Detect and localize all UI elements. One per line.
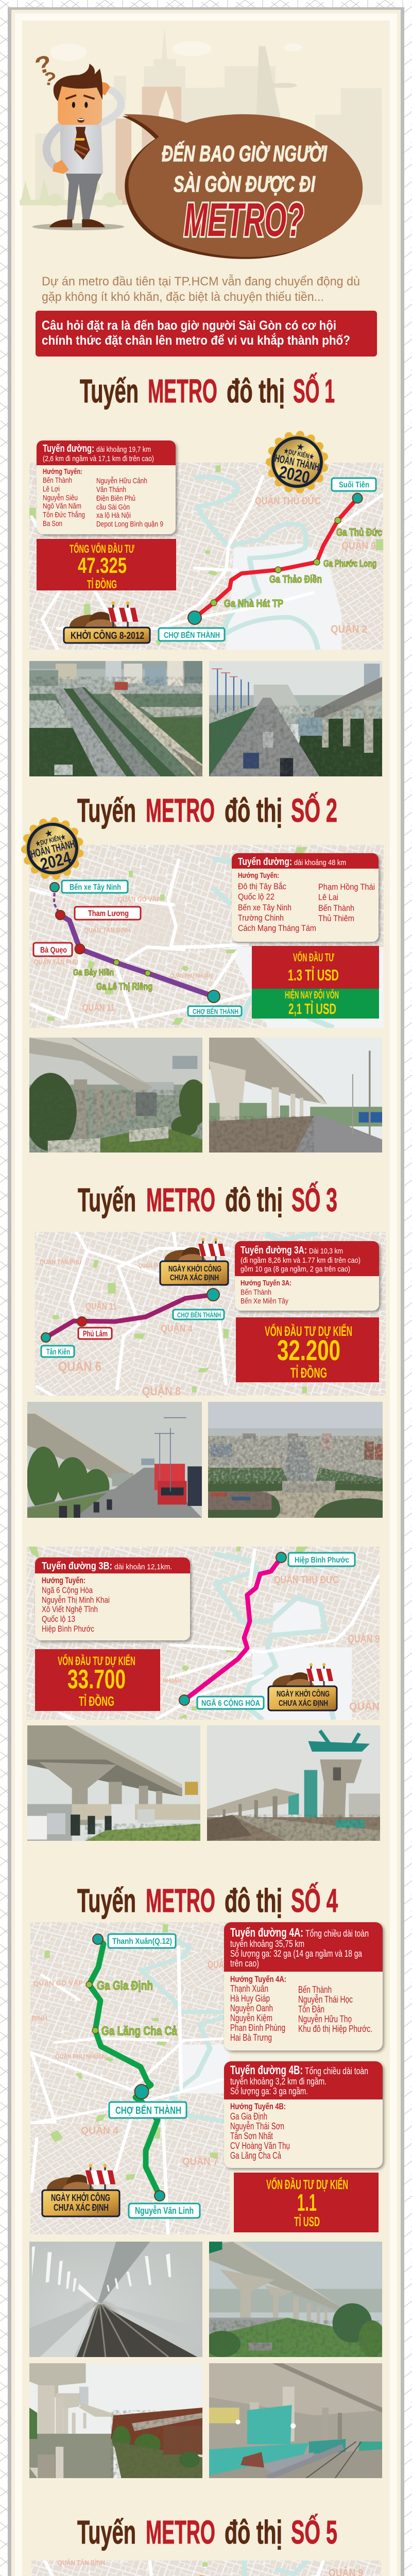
speech bubble (123, 114, 363, 259)
district labels: QUẬN TÂN PHÚ (34, 957, 78, 966)
station names: CHỢ BẾN THÀNH (164, 630, 220, 640)
info card 4A: Hai Bà Trưng (230, 2032, 272, 2043)
info card line 3B: Hiệp Bình Phước (42, 1624, 94, 1634)
station names (33, 880, 242, 1016)
district labels: QUẬN 2 (331, 623, 367, 635)
info card line 3A: Dài 10,3 km (309, 1247, 343, 1256)
district labels (40, 1257, 193, 1398)
investment box line 3B: 33.700 (67, 1665, 126, 1694)
district labels (34, 894, 212, 1013)
heading line 1: Tuyến (80, 372, 139, 410)
bubble title: METRO? (184, 194, 304, 246)
info card line 2: Bến Thành (318, 903, 354, 913)
photo: viaduct with traffic (27, 1725, 200, 1841)
info card line 2 (232, 853, 379, 942)
heading line 2: SỐ 2 (291, 792, 337, 829)
heading line 2: đô thị (225, 792, 282, 829)
investment box line 3B: VỐN ĐẦU TƯ DỰ KIẾN (58, 1654, 135, 1668)
district labels: QUẬN PH (139, 1262, 160, 1269)
info card line 3A: Tuyến đường 3A: (241, 1245, 307, 1256)
photo: viaduct over road (209, 1038, 382, 1153)
heading line 1: đô thị (227, 372, 285, 410)
question marks: ? (32, 49, 55, 79)
heading line 4: đô thị (225, 1882, 282, 1919)
badge: completion 2020: ★ (296, 442, 305, 452)
district labels: QUẬN 9 (348, 1633, 380, 1645)
map line 2 (29, 845, 384, 1028)
info card line 3B: Hướng Tuyến: (42, 1575, 85, 1585)
district labels (31, 1959, 224, 2167)
heading line 5 (77, 2514, 337, 2551)
question marks: ? (42, 67, 57, 90)
investment box line 3A: TỈ ĐỒNG (290, 1364, 327, 1381)
heading line 1: SỐ 1 (293, 372, 335, 410)
district labels: QUẬN 4 (81, 2124, 119, 2137)
district labels: QUẬN 11 (82, 1002, 115, 1013)
station names: Ga Nhà Hát TP (224, 598, 283, 609)
station names: CHỢ BẾN THÀNH (193, 1007, 238, 1015)
section: metro line 3B (27, 1547, 381, 1841)
info card line 3B: Tuyến đường 3B: (42, 1561, 112, 1572)
info card 4A: Hướng Tuyến 4A: (230, 1974, 286, 1984)
heading line 4 (77, 1882, 338, 1919)
badge: completion 2024: 2024 (38, 848, 73, 874)
info card line 1: xa lộ Hà Nội (96, 511, 131, 520)
photo: road with viaduct (209, 661, 382, 776)
bubble title: SÀI GÒN ĐƯỢC ĐI (174, 171, 316, 197)
district labels (163, 1573, 380, 1713)
investment box line 3A: 32.200 (277, 1334, 340, 1366)
info card 4A: Tôn Đản (298, 2004, 324, 2014)
heading line 1: METRO (148, 372, 217, 410)
info card line 3A: Bến Xe Miền Tây (241, 1297, 288, 1306)
intro text: Dự án metro đầu tiên tại TP.HCM vẫn đang chuyển động dù (42, 275, 360, 289)
photo: road and red truck (27, 1402, 202, 1518)
info card 4A: Nguyễn Oanh (230, 2003, 273, 2013)
station names: Thanh Xuân(Q.12) (112, 1937, 172, 1946)
heading line 3: Tuyến (78, 1181, 136, 1218)
icon: construction date unknown: CHƯA XÁC ĐỊNH (170, 1273, 219, 1282)
info card 4B (224, 2061, 383, 2168)
photo: city and river aerial (208, 1402, 383, 1518)
info card line 1: dài khoảng 19,7 km (96, 445, 151, 454)
info card 4B: Hướng Tuyến 4B: (230, 2102, 286, 2111)
info card line 2: dài khoảng 48 km (294, 858, 346, 867)
bubble title: ĐẾN BAO GIỜ NGƯỜI (162, 141, 328, 166)
icon: construction date unknown: NGÀY KHỞI CÔNG (51, 2192, 110, 2203)
photo: viaduct over canal (29, 2363, 202, 2478)
heading line 3: SỐ 3 (291, 1181, 337, 1218)
station names: Tham Lương (88, 909, 129, 918)
station names: Bà Quẹo (40, 946, 67, 955)
badge: completion 2020: 2020 (278, 462, 312, 487)
station names: Ga Lê Thị Riêng (96, 981, 152, 992)
district labels: QUẬN 6 (58, 1359, 101, 1374)
map line 3A (35, 1232, 386, 1398)
route line 1 (195, 498, 357, 618)
info card 4A: tuyến khoảng 35,75 km (230, 1939, 304, 1949)
info card line 3B: dài khoản 12,1km. (114, 1563, 172, 1571)
info card line 1: Văn Thánh (96, 485, 126, 494)
icon: construction date unknown: CHƯA XÁC ĐỊNH (54, 2202, 109, 2213)
info card 4A: Phan Đình Phùng (230, 2023, 285, 2033)
badge: completion 2020 (265, 430, 330, 495)
station names (41, 1310, 224, 1357)
heading line 3 (78, 1181, 337, 1218)
station names: Ga Phước Long (323, 558, 376, 569)
info card line 1 (37, 440, 176, 534)
info card line 2: Phạm Hồng Thái (318, 882, 375, 892)
investment box line 4 (234, 2173, 379, 2232)
investment box line 1: 47.325 (78, 553, 127, 578)
badge: completion 2020: ★DỰ KIẾN★ (283, 447, 315, 461)
heading line 2: Tuyến (77, 792, 136, 829)
icon: construction date unknown: CHƯA XÁC ĐỊNH (279, 1698, 328, 1708)
district labels: BÌNH (31, 2014, 47, 2022)
section: metro line 3A (27, 1181, 386, 1518)
photo: construction pier (207, 1725, 380, 1841)
badge: completion 2024: ★ (44, 828, 54, 839)
station names: Suối Tiên (339, 481, 369, 489)
icon: construction date unknown (160, 1238, 228, 1285)
info card 4B: Tổng chiều dài toàn (305, 2066, 368, 2076)
info card 4A: Khu đô thị Hiệp Phước. (298, 2024, 372, 2034)
info card 4B: Nguyễn Thái Sơn (230, 2121, 284, 2131)
info card 4B: CV Hoàng Văn Thụ (230, 2141, 290, 2151)
info card line 1: Điện Biên Phủ (96, 494, 135, 503)
section: metro line 5 (29, 2514, 385, 2576)
info card line 2: Cách Mạng Tháng Tám (238, 923, 316, 933)
info card 4A: Nguyễn Hữu Thọ (298, 2013, 352, 2024)
badge: completion 2024: HOÀN THÀNH (29, 838, 76, 860)
info card line 1: Ba Son (43, 519, 62, 528)
question callout (36, 311, 377, 357)
info card line 3B: Ngã 6 Cộng Hòa (42, 1585, 93, 1595)
icon: construction date unknown: NGÀY KHỞI CÔNG (168, 1264, 221, 1274)
heading line 3: METRO (146, 1181, 215, 1218)
station names: NGÃ 6 CỘNG HÒA (201, 1698, 260, 1708)
route line 4 (89, 1939, 160, 2196)
info card line 2: Trường Chinh (238, 913, 284, 923)
investment box line 3A (236, 1317, 379, 1382)
station names: Hiệp Bình Phước (295, 1556, 349, 1565)
station names: Bến xe Tây Ninh (70, 883, 121, 892)
district labels: QUẬN TÂN BÌNH (84, 925, 130, 934)
question callout: Câu hỏi đặt ra là đến bao giờ người Sài Gòn có cơ hội (42, 318, 336, 333)
info card 4B: Tân Sơn Nhất (230, 2131, 273, 2141)
stations line 3B (179, 1552, 286, 1705)
info card 4A: Nguyễn Kiệm (230, 2012, 272, 2023)
map line 5 (31, 2558, 381, 2576)
info card line 1: Depot Long Bình quận 9 (96, 520, 163, 529)
stations line 3A (41, 1289, 219, 1342)
map line 1 (29, 463, 383, 650)
info card 4A: Bến Thành (298, 1985, 332, 1995)
investment box line 1: TỔNG VỐN ĐẦU TƯ (70, 542, 134, 555)
heading line 5: METRO (146, 2514, 215, 2551)
investment box line 1 (37, 539, 176, 591)
district labels: QUẬN THỦ ĐỨC (255, 495, 321, 507)
section: metro line 1 (29, 372, 383, 776)
intro text: gặp không ít khó khăn, đặc biệt là chuyện thiếu tiền... (42, 290, 324, 304)
photo: viaduct and greenery (209, 2242, 382, 2357)
info card 4B: Tuyến đường 4B: (230, 2063, 303, 2077)
info card line 1: Lê Lợi (43, 485, 60, 494)
heading line 5: Tuyến (77, 2514, 136, 2551)
district labels: QUẬN TÂN PHÚ (40, 1257, 81, 1266)
skyline (20, 26, 382, 207)
investment box line 2 (252, 946, 379, 1019)
station names: Phú Lâm (83, 1330, 108, 1338)
info card line 2: Quốc lộ 22 (238, 892, 274, 902)
info card line 3A: (đi ngầm 8,26 km và 1.77 km đi trên cao) (241, 1256, 360, 1265)
info card 4A: Nguyễn Thái Học (298, 1994, 353, 2005)
question callout: chính thức đặt chân lên metro để vi vu khắp thành phố? (42, 332, 350, 348)
district labels: QUẬN 9 (341, 539, 376, 552)
district labels: QUẬN 7 (182, 2155, 218, 2167)
info card line 1: Ngô Văn Năm (43, 502, 81, 511)
info card line 3A (235, 1241, 379, 1311)
info card 4B: Ga Gia Định (230, 2111, 267, 2122)
investment box line 2: 2,1 TỈ USD (288, 1000, 336, 1018)
info card line 2: Đô thị Tây Bắc (238, 882, 286, 891)
photo: bridge aerial (29, 661, 202, 776)
heading line 1 (80, 372, 335, 410)
info card line 3A: Hướng Tuyến 3A: (241, 1279, 291, 1287)
station names: Ga Thủ Đức (336, 527, 382, 538)
info card line 1: Nguyễn Siêu (43, 494, 78, 502)
map line 3B (27, 1547, 380, 1720)
info card 4A: Tuyến đường 4A: (230, 1926, 303, 1940)
info card 4A: Thạnh Xuân (230, 1984, 268, 1994)
district labels (31, 2558, 366, 2576)
investment box line 4: TỈ USD (294, 2214, 320, 2229)
icon: construction date unknown: NGÀY KHỞI CÔNG (277, 1689, 330, 1699)
info card 4A: Số lượng ga: 32 ga (14 ga ngầm và 18 ga (230, 1948, 363, 1959)
info card line 1: Hướng Tuyến: (43, 467, 82, 476)
info card 4A: trên cao) (230, 1958, 259, 1969)
info card line 1: Tôn Đức Thắng (43, 511, 85, 519)
investment box line 3A: VỐN ĐẦU TƯ DỰ KIẾN (265, 1323, 352, 1339)
heading line 4: SỐ 4 (291, 1882, 338, 1919)
photo: tunnel with tracks (29, 2242, 202, 2357)
station names: Tân Kiên (46, 1348, 70, 1357)
route line 3A (46, 1295, 213, 1337)
info card line 1: (2,6 km đi ngầm và 17,1 km đi trên cao) (43, 454, 154, 463)
district labels (255, 495, 376, 635)
district labels: QUẬN PHÚ NHUẬN (170, 972, 212, 979)
route line 2 (54, 887, 214, 996)
district labels: QUẬN 11 (85, 1301, 117, 1312)
icon: construction date unknown (42, 2164, 119, 2216)
station names (159, 478, 382, 641)
photo: underground station (209, 2363, 382, 2478)
district labels: QUẬN TÂN BÌNH (58, 2558, 105, 2567)
info card line 2: Tuyến đường: (238, 856, 292, 868)
info card line 1: Bến Thành (43, 476, 72, 485)
info card line 3B: Xô Viết Nghệ Tĩnh (42, 1604, 98, 1614)
investment box line 2: 1.3 TỈ USD (288, 966, 339, 984)
heading line 2 (77, 792, 337, 829)
section: metro line 4 (29, 1882, 385, 2478)
icon: construction date unknown (268, 1663, 337, 1710)
station names: Ga Thảo Điền (269, 574, 322, 585)
district labels: QUẬN 4 (161, 1323, 193, 1334)
info card line 2: Lê Lai (318, 892, 338, 902)
station names: Ga Gia Định (97, 1979, 153, 1993)
investment box line 3B (35, 1649, 160, 1711)
info card line 1: cầu Sài Gòn (96, 503, 130, 512)
info card line 2: Hướng Tuyến: (238, 871, 279, 880)
info card 4B: Số lượng ga: 3 ga ngầm. (230, 2086, 308, 2096)
station names: Ga Bảy Hiền (73, 968, 114, 977)
stations line 1 (188, 494, 363, 624)
investment box line 4: VỐN ĐẦU TƯ DỰ KIẾN (266, 2177, 348, 2192)
info card line 3A: gồm 10 ga (8 ga ngầm, 2 ga trên cao) (241, 1265, 350, 1274)
heading line 2: METRO (146, 792, 215, 829)
bubble title (162, 141, 328, 246)
info card 4A: Hà Huy Giáp (230, 1993, 270, 2004)
district labels: QUẬN PHÚ NHUẬN (55, 2053, 106, 2060)
investment box line 4: 1.1 (297, 2189, 317, 2216)
badge: completion 2024 (20, 816, 85, 882)
district labels: QUẬN 8 (142, 1384, 181, 1398)
man character (32, 64, 124, 230)
station names: Nguyễn Văn Linh (135, 2205, 194, 2216)
badge: completion 2020: HOÀN THÀNH (273, 452, 320, 473)
district labels: NHUẬN (163, 1676, 181, 1684)
info card line 3B: Nguyễn Thị Minh Khai (42, 1595, 110, 1605)
info card line 2: Bến xe Tây Ninh (238, 903, 291, 912)
station names: CHỢ BẾN THÀNH (177, 1311, 221, 1319)
heading line 4: Tuyến (77, 1882, 136, 1919)
info card line 1: Tuyến đường: (43, 443, 94, 454)
icon: construction start (64, 601, 150, 643)
investment box line 3B: TỈ ĐỒNG (79, 1693, 114, 1709)
hero illustration (20, 26, 382, 259)
info card line 3B: Quốc lộ 13 (42, 1614, 75, 1624)
intro text (42, 275, 360, 304)
station names: CHỢ BẾN THÀNH (115, 2105, 181, 2116)
info card 4B: tuyến khoảng 3,2 km đi ngầm. (230, 2076, 327, 2087)
district labels: QUẬN THỦ ĐỨC (274, 1573, 339, 1586)
map line 4 (30, 1922, 230, 2234)
district labels: QUẬN (349, 1700, 380, 1713)
stations line 2 (50, 883, 220, 1003)
stations line 4 (86, 1934, 165, 2201)
info card line 2: Thủ Thiêm (318, 913, 354, 923)
info card line 3B (35, 1557, 190, 1640)
photo: viaduct and tree (29, 1038, 202, 1153)
info card 4A (224, 1922, 383, 2050)
badge: completion 2024: ★DỰ KIẾN★ (35, 833, 66, 848)
question marks (32, 49, 57, 90)
section: metro line 2 (20, 792, 384, 1153)
info card line 3A: Bến Thành (241, 1288, 271, 1297)
info card 4A: Tổng chiều dài toàn (305, 1928, 369, 1939)
icon: construction start: KHỞI CÔNG 8-2012 (71, 630, 144, 641)
heading line 4: METRO (146, 1882, 215, 1919)
route line 3B (184, 1557, 281, 1700)
investment box line 2: HIỆN NAY ĐỘI VỐN (285, 989, 339, 1001)
station names (97, 1934, 200, 2218)
station names: Ga Lăng Cha Cả (101, 2024, 178, 2038)
station names (197, 1553, 355, 1709)
heading line 5: đô thị (225, 2514, 282, 2551)
district labels: QUẢ (208, 1959, 224, 1971)
heading line 3: đô thị (225, 1181, 283, 1218)
investment box line 1: TỈ ĐỒNG (87, 577, 117, 591)
district labels: QUẬN GÒ VẤP (118, 894, 161, 903)
info card 4B: Ga Lăng Cha Cả (230, 2150, 282, 2161)
district labels: QUẬN GÒ VẤP (33, 1978, 83, 1987)
investment box line 2: VỐN ĐẦU TƯ (293, 951, 334, 964)
info card line 1: Nguyễn Hữu Cảnh (96, 477, 147, 485)
heading line 5: SỐ 5 (291, 2514, 337, 2551)
